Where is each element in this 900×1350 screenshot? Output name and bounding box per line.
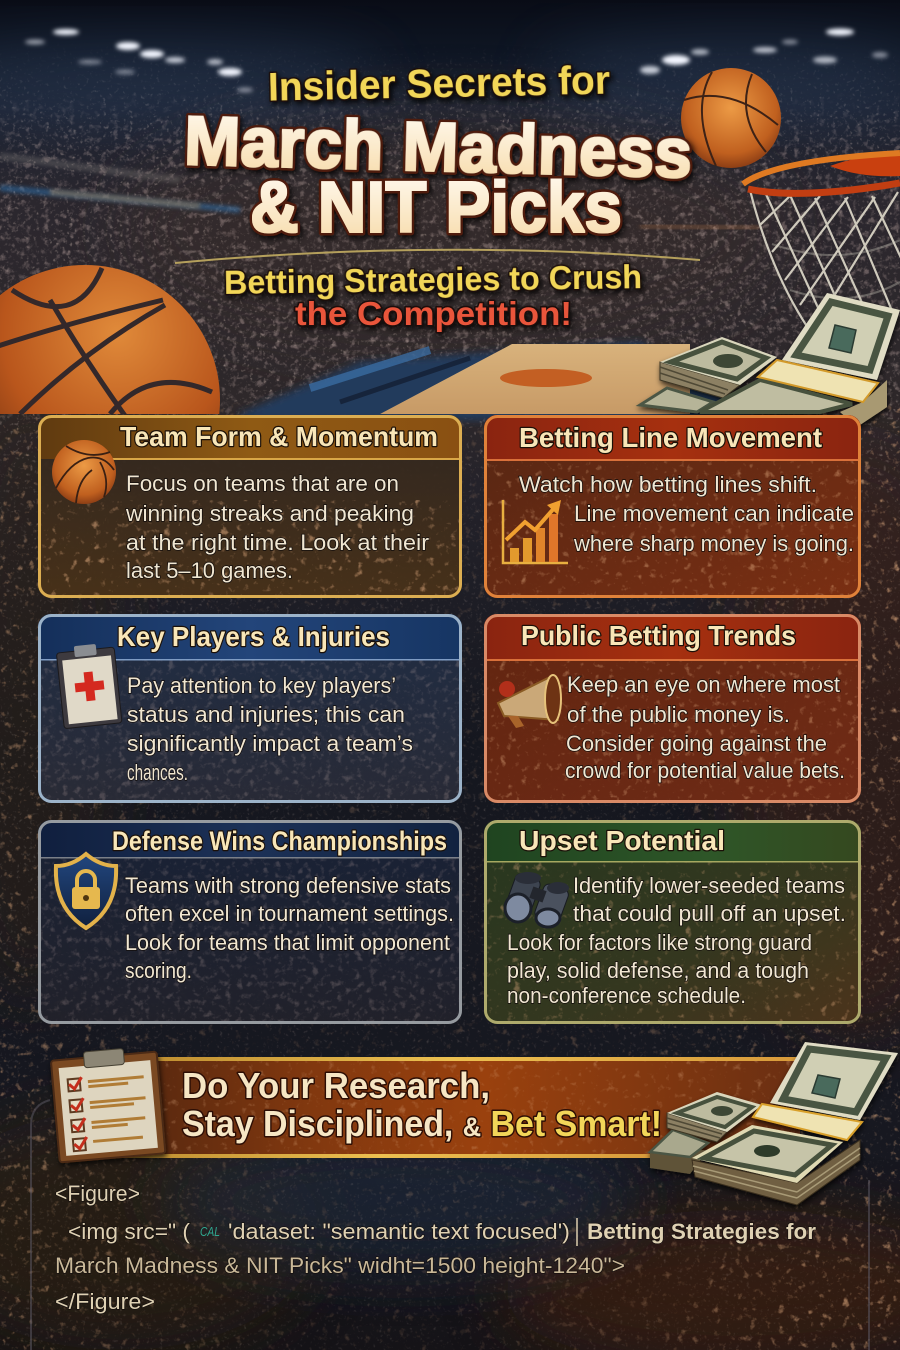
panel: public betting trends: [484, 614, 861, 803]
body text: public betting: crowd for potential value bets.: [565, 758, 845, 783]
stadium lights right: [640, 28, 888, 74]
panel: team form and momentum: [38, 415, 462, 598]
title divider: [175, 250, 700, 263]
body text: key players: chances.: [127, 760, 188, 785]
body text: key players: status and injuries; this can: [127, 702, 405, 727]
title line: nit picks: & NIT Picks: [250, 168, 622, 248]
panel: upset potential: [484, 820, 861, 1024]
body text: upset potential: play, solid defense, and a tough: [507, 958, 809, 983]
icon: rising chart: [503, 500, 568, 563]
hoop and net: [743, 153, 900, 328]
body text: team form: at the right time. Look at their: [126, 530, 429, 555]
money stack: top right: [640, 293, 900, 427]
body text: betting line: [519, 472, 854, 556]
body text: defense: often excel in tournament settings.: [125, 901, 454, 926]
body text: key players: significantly impact a team’s: [127, 731, 413, 756]
title line: march madness: March Madness: [183, 101, 693, 193]
code text block: [55, 1181, 816, 1314]
code text block: </Figure>: [55, 1289, 155, 1314]
code text block: CAL: [200, 1224, 220, 1239]
icon: medical clipboard: [56, 642, 122, 729]
heading: upset potential: Upset Potential: [519, 825, 725, 856]
icon: binoculars: [505, 872, 570, 927]
stadium lights left: [25, 29, 253, 92]
small basketball: [681, 68, 781, 168]
large basketball: [0, 265, 220, 414]
arena upper ring stripes: [0, 156, 760, 228]
title line: insider secrets: Insider Secrets for: [268, 58, 610, 110]
code text block: <Figure>: [55, 1181, 140, 1206]
subtitle: the competition: the Competition!: [295, 295, 572, 332]
body text: upset potential: that could pull off an upset.: [573, 901, 846, 926]
basketball court: [240, 342, 760, 420]
icon: shield with padlock: [56, 854, 116, 928]
subtitle: betting strategies: Betting Strategies to Crush: [224, 258, 642, 301]
heading: team form: Team Form & Momentum: [120, 421, 438, 452]
body text: team form: [125, 471, 429, 583]
body text: upset potential: Identify lower-seeded teams: [573, 873, 845, 898]
body text: team form: Focus on teams that are on: [126, 471, 399, 496]
body text: defense: scoring.: [125, 958, 192, 983]
body text: team form: last 5–10 games.: [126, 558, 293, 583]
heading: betting line: Betting Line Movement: [519, 422, 822, 453]
body text: public betting: [565, 672, 845, 783]
panel: defense wins championships: [38, 820, 462, 1024]
body text: betting line: Line movement can indicate: [574, 501, 854, 526]
body text: upset potential: non-conference schedule.: [507, 983, 746, 1008]
code text block: Betting Strategies for: [587, 1219, 816, 1244]
panel: betting line movement: [484, 415, 861, 598]
banner text: line two: Stay Disciplined, & Bet Smart!: [182, 1103, 662, 1144]
body text: defense: Teams with strong defensive stats: [125, 873, 451, 898]
body text: betting line: Watch how betting lines shift.: [519, 472, 817, 497]
banner text: line one: Do Your Research,: [182, 1065, 490, 1106]
money stack: banner: [650, 1042, 898, 1205]
heading: defense: Defense Wins Championships: [112, 826, 447, 856]
code text block: 'dataset: "semantic text focused'): [228, 1219, 570, 1244]
body text: defense: [125, 873, 454, 983]
heading: key players: Key Players & Injuries: [117, 621, 390, 652]
body text: public betting: of the public money is.: [567, 702, 790, 727]
code text block: <img src=" (: [68, 1219, 191, 1244]
body text: defense: Look for teams that limit opponent: [125, 930, 450, 955]
panel: key players and injuries: [38, 614, 462, 803]
body text: team form: winning streaks and peaking: [125, 501, 414, 526]
body text: key players: [127, 673, 413, 785]
body text: betting line: where sharp money is going.: [573, 531, 854, 556]
icon: checklist clipboard: [50, 1046, 165, 1162]
body text: public betting: Consider going against the: [566, 731, 827, 756]
title: [175, 58, 700, 332]
body text: public betting: Keep an eye on where most: [567, 672, 840, 697]
body text: key players: Pay attention to key players’: [127, 673, 396, 698]
code text block: March Madness & NIT Picks" widht=1500 height-1240">: [55, 1253, 625, 1278]
body text: upset potential: [507, 873, 846, 1008]
lower frame outline: [31, 1100, 869, 1350]
body text: upset potential: Look for factors like strong guard: [507, 930, 812, 955]
icon: megaphone: [498, 675, 561, 728]
icon: basketball: [52, 440, 116, 504]
heading: public betting: Public Betting Trends: [521, 620, 796, 651]
banner: do your research: [100, 1057, 800, 1158]
